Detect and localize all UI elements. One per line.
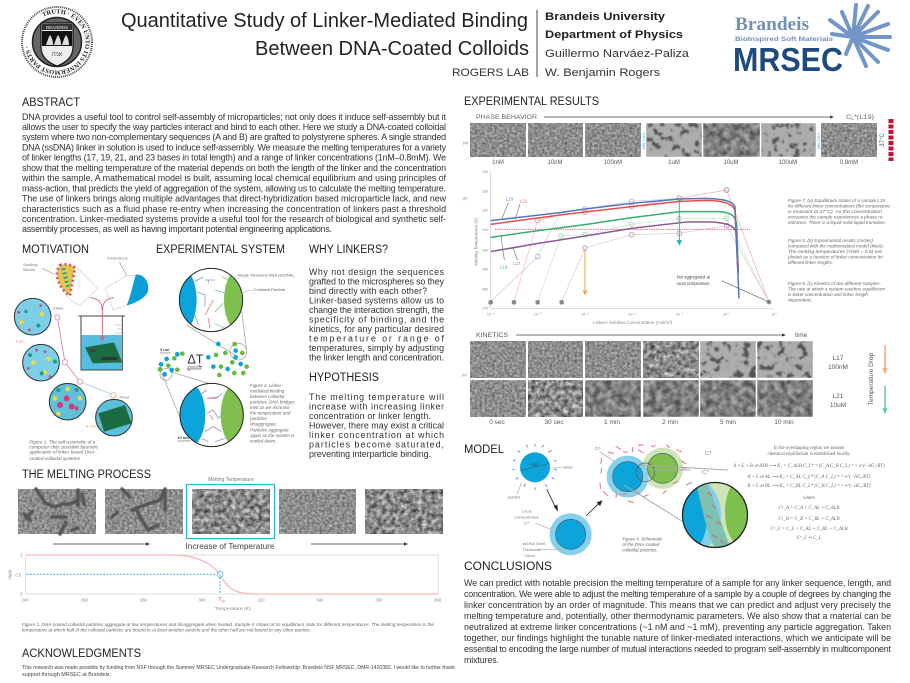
figure captions 7, 5, 6: is linker concentration and linker length	[788, 292, 868, 297]
axis tick labels: 340	[316, 598, 324, 603]
series labels and leaders: L19	[500, 264, 508, 269]
yield curve	[26, 555, 438, 594]
top magnified circle: free linkers	[178, 268, 244, 332]
orange temperature drop arrow	[583, 249, 587, 294]
concentration labels: 1nM	[492, 160, 504, 166]
hypothesis: HYPOTHESIS	[309, 372, 379, 384]
magnified overlap lens: Cₗ*	[702, 470, 708, 476]
concentration labels	[492, 160, 858, 166]
y tick labels: 270	[482, 307, 488, 311]
figure captions 7, 5, 6: dependent.	[788, 298, 812, 302]
title	[121, 10, 529, 79]
local concentration shell: Thickness	[523, 547, 541, 552]
why linkers: change the interaction strength, the	[309, 305, 444, 315]
axis tick labels: 380	[434, 598, 442, 603]
ssDNA-coated bead: ~1μm	[529, 463, 538, 467]
abstract	[21, 97, 447, 234]
y tick labels: 280	[482, 287, 488, 291]
phase behavior header: PHASE BEHAVIOR	[476, 114, 537, 121]
time labels: 1 min	[604, 419, 620, 426]
abstract: within the sample. A mathematical model is built, assuming local chemical equilibrium and using principles of	[21, 173, 447, 183]
y tick labels: 310	[482, 228, 488, 232]
experimental results heading: EXPERIMENTAL RESULTS	[464, 96, 599, 108]
figure 3 caption	[22, 622, 434, 632]
ssDNA-coated bead	[508, 444, 573, 499]
abstract: mass-action, that predicts the yield of aggregation of the system, allowing us to calculate the melting temperature.	[22, 184, 446, 194]
time labels: 30 sec	[544, 419, 564, 426]
MRSEC logo: MRSEC	[733, 41, 843, 78]
axis tick labels: 320	[257, 598, 265, 603]
x tick labels: 10⁻⁶	[487, 313, 495, 317]
axis tick labels: 0.5	[15, 573, 22, 578]
Brandeis University seal: BRANDEIS	[46, 25, 69, 30]
leader lines	[162, 312, 247, 432]
conclusions: We can predict with notable precision the melting temperature of a sample for any linker sequence, length, and	[464, 578, 891, 588]
x tick labels: 10⁻³	[628, 313, 636, 317]
axes	[491, 172, 774, 308]
phase behavior micrographs	[470, 123, 877, 157]
conclusions: essential to encoding the large number of mutual interactions needed to program self-assembly in multicomponent	[464, 644, 892, 654]
MRSEC logo: Brandeis	[735, 14, 809, 35]
chemical equilibrium equations: A + L ⇌ AL ⟶ K₂ = C_AL C_L* (C_A C_L)⁻¹ = e^(−ΔG₂/RT)	[746, 474, 871, 480]
chemical equilibrium equations: A + L + B ⇌ ALB ⟶ K₁ = C_ALB C_L*⁻¹ (C_A C_B C_L)⁻¹ = e^(−ΔG₁/RT)	[732, 463, 885, 469]
authors and affiliation: Brandeis University	[545, 11, 666, 23]
chemical equilibrium equations: In the overlapping region we assume	[774, 446, 844, 451]
figure 2 caption: Particles aggregate	[250, 427, 289, 432]
particle dots	[159, 342, 243, 377]
motivation figure: self-assembly of a computer chip	[14, 255, 148, 461]
figure captions 7, 5, 6: different linker lengths.	[788, 260, 833, 265]
tilted tube with building blocks: Building	[23, 262, 38, 267]
ssDNA-coated bead: Bead	[563, 465, 573, 470]
conclusions: mixtures.	[464, 655, 499, 665]
abstract: concentration. Linker-mediated systems provide a useful tool for the research of biological and synthetic self-	[22, 214, 446, 224]
scale bars and labels: Colloidal Particle	[253, 287, 286, 292]
figure captions 7, 5, 6: entrance. There is a liquid-solid-liquid transition.	[788, 220, 886, 225]
concentration labels: 10nM	[547, 160, 563, 166]
why linkers: specificity of binding, and the	[309, 314, 444, 324]
scale bars and labels: 3 um	[160, 347, 170, 352]
time labels: 5 min	[720, 419, 736, 426]
yield vs temperature chart: Yield	[7, 569, 12, 580]
Brandeis University seal: אמת	[52, 52, 63, 58]
chemical equilibrium equations: where	[803, 496, 815, 501]
red dashed reference line	[495, 228, 750, 231]
acknowledgments: This research was made possible by funding from NSF through the Summer MRSEC Undergraduate Research Fellowship: Brandeis NSF MRSEC, DMR-1420382. I would like to further thank	[22, 665, 455, 671]
kinetics sample labels: 100nM	[828, 364, 848, 371]
concentration labels: 10uM	[723, 160, 739, 166]
yield vs temperature chart: m	[222, 599, 225, 603]
kinetics header	[476, 332, 808, 339]
series labels and leaders: L17	[513, 261, 521, 266]
x tick labels: 10⁻⁴	[581, 313, 589, 317]
figure 4 caption: colloidal particles.	[622, 548, 658, 553]
hypothesis	[309, 372, 444, 459]
local concentration shell: ssDNA Shell	[523, 541, 545, 546]
melting temperature plot: (b)	[463, 196, 468, 201]
kinetics sample labels	[828, 355, 848, 409]
stage labels: 5 mm	[86, 424, 97, 429]
teal drop arrow	[884, 386, 886, 412]
abstract: of linker lengths (17, 19, 21, and 23 bases in total length) and a range of linker concentrations (1nM–0.8mM). We	[22, 152, 446, 162]
figure 3 caption: temperature at which half of the colloidal particles are bound to at least another particle and the other half are not bound to any other particle.	[22, 628, 311, 632]
figure 2 caption: mediated binding	[250, 388, 285, 393]
figure 2 caption: Figure 2. Linker-	[250, 383, 283, 388]
conclusions	[464, 561, 892, 665]
abstract: DNA (ssDNA) linker in solution is used to induce self-assembly. We measure the melting temperatures for a variety	[22, 142, 447, 152]
kinetics sample labels: 10uM	[830, 402, 846, 409]
x tick labels: 10⁻¹	[723, 313, 731, 317]
kinetics header: time	[795, 332, 808, 339]
yield vs temperature chart	[7, 553, 442, 612]
abstract: DNA provides a useful tool to control self-assembly of microparticles; not only does it induce self-assembly but it	[22, 112, 447, 122]
not aggregated callout: Not aggregated at	[677, 274, 711, 279]
temperature drop label: Temperature Drop	[868, 352, 875, 405]
x tick labels: 10⁰	[771, 313, 777, 317]
flow arrows	[547, 489, 602, 516]
data point rings	[535, 188, 729, 259]
melting labels: MELTING	[642, 133, 646, 149]
axis tick labels: 1	[20, 553, 23, 558]
chemical equilibrium equations: Cᵀ_L = C_L + C_AL + C_BL + C_ALB	[770, 526, 848, 532]
ssDNA-coated bead: ssDNA	[508, 494, 520, 499]
acknowledgments: support through MRSEC at Brandeis.	[22, 672, 111, 678]
figure 1 caption: Figure 1. The self-assembly of a	[29, 439, 96, 444]
axis titles: Temperature (K)	[215, 606, 251, 612]
axis tick labels: 300	[198, 598, 206, 603]
series labels and leaders: L21	[520, 198, 528, 203]
figure 3 caption: Figure 3. DNA-coated colloidal particles aggregate at low temperatures and disaggregate when heated. Sample is shown at its equilibrium state for different temperatures. The melting temperature is the	[22, 622, 434, 627]
figure 1 caption	[29, 439, 99, 461]
time labels: 10 min	[774, 419, 794, 426]
authors and affiliation: W. Benjamin Rogers	[545, 67, 661, 79]
why linkers: WHY LINKERS?	[309, 244, 388, 256]
figure captions 7, 5, 6: compared with the mathematical model (lines).	[788, 244, 884, 248]
temperature label: 37°C	[880, 133, 886, 147]
figure captions 7, 5, 6: is invariant at 37°C). As the concentration	[788, 209, 882, 214]
the melting process heading: THE MELTING PROCESS	[22, 469, 151, 481]
scale bars and labels	[160, 272, 295, 441]
assembly stages	[14, 298, 132, 436]
figure 4 caption: Figure 4. Schematic	[622, 537, 663, 542]
linker-surrounded particle pair: Cₗ*	[595, 446, 601, 451]
melting micrographs	[18, 489, 443, 534]
why linkers: temperatures, simply by adjusting	[309, 343, 444, 353]
phase behavior header: L	[851, 116, 855, 121]
model heading: MODEL	[464, 444, 505, 456]
figure captions 7, 5, 6: plotted as a function of linker concentration for	[787, 254, 883, 260]
Brandeis University seal: TRUTH · EVEN UNTO ITS INNERMOST PARTS ·	[26, 9, 90, 75]
local concentration shell: Concentration	[514, 514, 539, 519]
x tick labels: 10⁻²	[676, 313, 684, 317]
acknowledgments: ACKNOWLEDGMENTS	[22, 648, 141, 660]
orange drop arrow	[884, 345, 886, 372]
figure captions 7, 5, 6: The melting temperatures (Yield = 0.5) are	[788, 249, 882, 254]
hypothesis: The melting temperature will	[309, 392, 444, 402]
authors and affiliation	[545, 11, 690, 79]
stage labels: Final	[120, 394, 129, 399]
dashed red temperature marker	[888, 119, 894, 161]
axis tick labels: 280	[140, 598, 148, 603]
y tick labels	[482, 170, 488, 311]
particles in stage circles	[17, 304, 82, 416]
why linkers: temperature or range of	[309, 334, 445, 344]
local concentration shell: ~15nm	[523, 553, 536, 558]
melting temperature plot	[463, 170, 777, 325]
abstract: system where two non-complementary sequences (A and B) are grafted to polystyrene spheres. A single stranded	[22, 132, 446, 142]
series labels and leaders: L23	[506, 197, 514, 202]
conclusions: neutralized at extreme linker concentrations (~1 nM and ~1 mM), preventing any particle aggregation. Taken	[464, 622, 891, 632]
phase behavior header	[476, 114, 874, 121]
tilted tube with building blocks	[23, 262, 97, 306]
melting labels: MELTING	[817, 133, 821, 149]
not aggregated callout: room temperature	[677, 281, 710, 286]
authors and affiliation: Guillermo Narváez-Paliza	[545, 48, 690, 60]
stage labels: 5 µm	[16, 338, 25, 343]
axis titles: Linkers Solution Concentration (mol/m³)	[593, 320, 673, 325]
why linkers: Linker-based systems allow us to	[309, 296, 444, 306]
figure 1 caption: coated colloidal systems	[29, 456, 81, 461]
axis tick labels: 360	[375, 598, 383, 603]
figure 2 caption: particles. DNA bridges	[249, 399, 295, 404]
magnified overlap lens: Cₗ*	[705, 451, 711, 457]
figure 2 caption: particles	[249, 416, 267, 421]
abstract: The use of linkers brings along multiple advantages that direct-hybridization based microparticle lack, and new	[22, 194, 447, 204]
yield vs temperature chart: T	[218, 597, 222, 603]
why linkers: the linker length and concentration.	[309, 352, 444, 362]
hypothesis: linker concentration at which	[309, 430, 444, 440]
conclusions: CONCLUSIONS	[464, 561, 552, 573]
gray not-aggregated points	[488, 300, 771, 305]
increase of temperature arrows	[53, 542, 408, 551]
chip in final stage	[98, 405, 132, 432]
stage labels: Initial	[53, 306, 63, 311]
hypothesis: However, there may exist a critical	[309, 420, 444, 430]
figure captions 7, 5, 6	[787, 198, 890, 302]
figure 2 caption	[249, 383, 295, 443]
teal temperature drop arrow	[677, 200, 681, 245]
experimental system figure	[158, 268, 295, 447]
melting labels	[642, 133, 821, 149]
title: ROGERS LAB	[452, 67, 529, 79]
linker-surrounded particle pair	[595, 445, 691, 503]
concentration labels: 100nM	[604, 160, 622, 166]
scale bars and labels: 10 nm	[177, 435, 189, 440]
beaker	[78, 316, 125, 370]
chemical equilibrium equations: Cᵀ_L ≃ C_L	[797, 535, 822, 541]
not aggregated callout	[677, 274, 769, 302]
local concentration shell: Local	[522, 508, 532, 513]
x tick labels	[487, 313, 777, 317]
kinetics sample labels: L17	[833, 355, 844, 362]
melting temperature plot: Melting Temperature (K)	[473, 217, 478, 266]
figure captions 7, 5, 6: Figure 6. (c) Kinetics of two different samples.	[788, 281, 881, 286]
figure 2 caption: the temperature and	[250, 411, 291, 416]
panel a tag: (a)	[463, 140, 469, 145]
hypothesis: preventing interparticle binding.	[309, 449, 431, 459]
tilted tube with building blocks: Blocks	[23, 267, 35, 272]
figure captions 7, 5, 6: for different linker concentrations (the temperature	[788, 204, 890, 208]
red funnel arrow	[90, 298, 114, 340]
hypothesis: increase with increasing linker	[309, 402, 444, 412]
melting temperature highlight box: Melting Temperature	[208, 477, 254, 483]
panel c tag: (c)	[462, 372, 467, 377]
y tick labels: 290	[482, 268, 488, 272]
time labels	[489, 419, 794, 426]
authors and affiliation: Department of Physics	[545, 29, 683, 41]
data series	[491, 190, 769, 302]
title: Between DNA-Coated Colloids	[255, 38, 529, 60]
magnified overlap lens	[624, 451, 748, 548]
stage labels	[16, 306, 129, 429]
y tick labels: 320	[482, 209, 488, 213]
figure captions 7, 5, 6: increases the sample experiences a phase re-	[788, 214, 884, 220]
concentration labels: 0.8mM	[840, 160, 858, 166]
axis tick labels: 260	[81, 598, 89, 603]
chemical equilibrium equations: Cᵀ_A = C_A + C_AL + C_ALB	[779, 505, 840, 511]
concentration labels: 100uM	[779, 160, 797, 166]
experimental system heading: EXPERIMENTAL SYSTEM	[156, 244, 285, 256]
phase behavior header: *(L19)	[854, 114, 874, 121]
acknowledgments	[22, 648, 455, 678]
chemical equilibrium equations: B + L ⇌ BL ⟶ K₃ = C_BL C_L* (C_B C_L)⁻¹ = e^(−ΔG₃/RT)	[747, 483, 871, 489]
figure 2 caption: cooled down.	[250, 438, 276, 443]
x tick labels: 10⁻⁵	[534, 313, 542, 317]
why linkers: bind directly with each other?	[309, 286, 427, 296]
concentration labels: 1uM	[668, 160, 680, 166]
y tick labels: 330	[482, 189, 488, 193]
figure captions 7, 5, 6: Figure 5. (b) Experimental results (circles)	[788, 238, 873, 243]
conclusions: melting temperature and, potentially, other thermodynamic parameters. We also show that a material can be	[464, 611, 891, 621]
kinetics header: KINETICS	[476, 332, 509, 339]
local concentration shell	[514, 508, 592, 558]
series labels and leaders	[500, 197, 528, 269]
chemical equilibrium equations	[732, 446, 885, 541]
increase of temperature arrows: Increase of Temperature	[186, 542, 275, 551]
tilted tube with instructions	[105, 255, 148, 310]
delta T: ΔT	[187, 352, 204, 366]
abstract: ABSTRACT	[22, 97, 80, 109]
bottom magnified circle: bound linkers	[180, 382, 244, 448]
time labels: 0 sec	[489, 419, 506, 426]
conclusions: linker concentration by an order of magnitude. This means that we can predict and adjust very precisely the	[464, 600, 891, 610]
y tick labels: 300	[482, 248, 488, 252]
melting temperature highlight box	[186, 477, 274, 538]
why linkers: Why not design the sequences	[309, 267, 445, 277]
axis tick labels	[15, 553, 442, 603]
phase behavior header: C	[846, 114, 851, 121]
why linkers	[309, 244, 445, 362]
melting point marker	[27, 571, 223, 594]
figure 2 caption: disaggregate.	[250, 422, 277, 427]
figure captions 7, 5, 6: Figure 7. (a) Equilibrium states of a sample L19	[788, 198, 885, 203]
model curves	[491, 198, 739, 298]
kinetics micrographs	[470, 341, 813, 417]
axis tick labels: 0	[20, 592, 23, 597]
equilibrium arrows	[187, 365, 202, 371]
y tick labels: 340	[482, 170, 488, 174]
MRSEC logo	[733, 5, 890, 78]
chemical equilibrium equations: Cᵀ_B = C_B + C_BL + C_ALB	[778, 516, 840, 522]
assembly path	[55, 315, 116, 398]
abstract: allows the user to specify the way particles interact and bind to each other. Here we study a DNA-coated colloidal	[22, 122, 446, 132]
local concentration shell: Cₗ*	[524, 520, 530, 525]
figure 1 caption: application of linker based DNA-	[29, 449, 97, 454]
scale bars and labels: Single Stranded DNA (ssDNA)	[237, 272, 295, 277]
abstract: characteristics such as a fluid phase re-entry when increasing the concentration of linkers past a threshold	[22, 204, 446, 214]
abstract: show that the melting temperature of the material depends on both the length of the linker and the concentration	[22, 163, 446, 173]
motivation heading: MOTIVATION	[22, 244, 89, 256]
figure 4 caption: of the DNA-coated	[622, 542, 660, 547]
figure 2 caption: between colloidal	[250, 394, 285, 399]
tilted tube with instructions: Instructions	[107, 255, 128, 260]
abstract: assembly processes, as well as having important potential engineering applications.	[22, 224, 332, 234]
figure 2 caption: melt as we increase	[250, 405, 290, 410]
conclusions: concentration. We were able to adjust the melting temperature of a sample by a couple of degrees by changing the	[464, 589, 891, 599]
time labels: 2 min	[662, 419, 678, 426]
hypothesis: particles become saturated,	[309, 440, 444, 450]
conclusions: together, our findings highlight the tunable nature of linker-mediated interactions, which we anticipate will be	[464, 633, 891, 643]
figure captions 7, 5, 6: The rate at which a system reaches equilibrium	[788, 286, 885, 292]
hypothesis: concentration or linker length.	[309, 411, 431, 421]
title: Quantitative Study of Linker-Mediated Binding	[121, 10, 528, 32]
why linkers: kinetics, for any particular desired	[309, 324, 444, 334]
kinetics sample labels: L21	[833, 393, 844, 400]
chemical equilibrium equations: chemical equilibrium is established locally.	[768, 452, 850, 457]
figure 2 caption: again as the system is	[250, 433, 295, 438]
why linkers: grafted to the microspheres so they	[309, 276, 445, 286]
figure 1 caption: computer chip: possible futuristic	[29, 444, 99, 449]
figure 4 caption	[622, 537, 663, 553]
MRSEC logo: BioInspired Soft Materials	[735, 36, 833, 43]
axis tick labels: 240	[21, 598, 29, 603]
model figure	[508, 444, 691, 558]
